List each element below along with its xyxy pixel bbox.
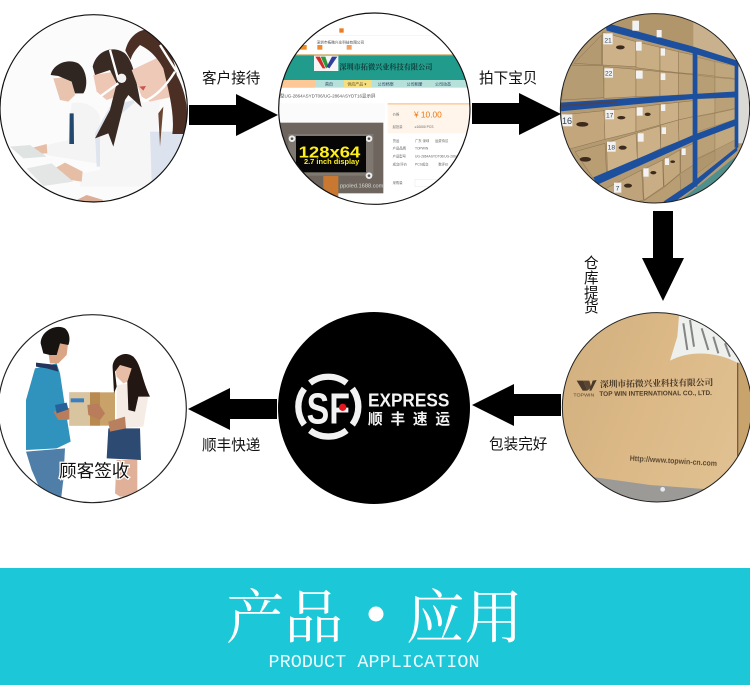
product specs xyxy=(393,138,458,187)
shipping label xyxy=(670,316,740,363)
navigation bar: 供应产品 ▾ xyxy=(347,81,366,87)
storage boxes: right bay xyxy=(697,57,735,173)
blue shelf beams xyxy=(560,24,738,205)
label: packed: 包装完好 xyxy=(489,436,547,453)
photo circle: customer signs for parcel xyxy=(0,314,187,504)
product specs: 运费待议 xyxy=(435,138,449,143)
product specs: 产品型号 xyxy=(393,154,407,159)
price panel: 起批量 xyxy=(393,124,403,129)
navigation bar xyxy=(270,80,477,88)
brand name: EXPRESS xyxy=(368,390,449,411)
label: warehouse pickup: 仓 xyxy=(584,255,599,272)
banner subtitle: PRODUCT APPLICATION xyxy=(268,652,480,673)
box labels and handles: 22 xyxy=(605,71,613,78)
agent: woman in the middle xyxy=(27,49,142,186)
brand name Chinese: 顺丰速运 xyxy=(368,410,450,428)
product specs: 采购量 xyxy=(393,180,403,185)
label: warehouse pickup: 库 xyxy=(584,270,599,287)
banner heading left: 产品 xyxy=(226,571,343,655)
arrow: shop page to warehouse xyxy=(472,93,561,135)
website address: Http://www.topwin-cn.com xyxy=(630,454,717,468)
storage boxes: left bay xyxy=(562,32,693,207)
shop header band: 深圳市拓微兴业科技有限公司 xyxy=(339,62,432,71)
caption: customer signature: 顾客签收 xyxy=(59,461,129,481)
product specs: 产品品牌 xyxy=(393,146,407,151)
agent: woman in the front xyxy=(125,30,187,183)
navigation bar: 公司档案 xyxy=(378,81,394,87)
agent: man at back xyxy=(10,61,86,158)
product photo: OLED display: 128x64 xyxy=(299,144,361,161)
photo circle: warehouse shelves xyxy=(560,13,750,204)
product specs: 广东 深圳 xyxy=(415,138,430,143)
banner heading right: 应用 xyxy=(406,571,523,655)
product specs: 成交/评价 xyxy=(393,162,408,167)
company logo mark xyxy=(573,380,597,398)
arrow: packaging to courier xyxy=(472,384,561,426)
logo ring xyxy=(298,377,358,437)
product photo: OLED display xyxy=(278,123,384,197)
navigation bar: 首页 xyxy=(325,81,333,87)
arrow: warehouse down to packaging xyxy=(642,211,684,301)
price panel: ≥10000 PCS xyxy=(415,125,434,129)
company name text: 深圳市拓微兴业科技有限公司 xyxy=(600,376,714,389)
circle: SF Express logo xyxy=(278,312,470,504)
arrow: courier to customer xyxy=(188,388,277,430)
banner dot xyxy=(368,606,384,622)
shop header band xyxy=(284,54,465,80)
product specs: 货运 xyxy=(393,138,400,143)
box labels and handles: 7 xyxy=(616,186,620,193)
label: warehouse pickup xyxy=(584,255,599,316)
photo circle: online shop page xyxy=(278,12,471,205)
navigation bar: 公司相册 xyxy=(407,81,423,87)
company English name: TOP WIN INTERNATIONAL CO., LTD. xyxy=(599,390,712,398)
label: SF courier: 顺丰快递 xyxy=(202,437,261,454)
label: warehouse pickup: 提 xyxy=(584,285,599,302)
box labels and handles: 21 xyxy=(604,37,612,44)
box labels and handles: 17 xyxy=(606,112,614,119)
woman receiving parcel xyxy=(107,354,150,497)
photo circle: online shop page: 深圳市拓微兴业科技有限公司 xyxy=(317,39,365,44)
photo circle: branded carton xyxy=(562,312,750,502)
company logo mark: TOPWIN xyxy=(573,392,595,398)
box labels and handles: 16 xyxy=(562,116,572,126)
navigation bar: 公司动态 xyxy=(435,81,451,87)
product specs: UG-2864ASYDT06/UG-2864 xyxy=(415,155,458,159)
box labels and handles xyxy=(562,21,686,193)
parcel xyxy=(69,392,115,426)
product specs: TOPWIN xyxy=(415,147,429,151)
box labels and handles: 18 xyxy=(608,144,615,151)
product specs: 数评价 xyxy=(438,162,449,167)
photo circle: online shop page: 型UG-2864ASYDT06/UG-2864ASYDT16显示屏 xyxy=(280,92,376,99)
price panel xyxy=(388,103,474,133)
arrow: customer service to shop page xyxy=(189,94,278,136)
label: place order: 拍下宝贝 xyxy=(479,70,537,87)
product photo: OLED display: 2.7 inch display xyxy=(304,157,360,166)
price panel: 价格 xyxy=(393,111,400,116)
logo letters: SF xyxy=(307,384,350,433)
label: customer reception: 客户接待 xyxy=(202,70,261,87)
product photo: OLED display: ppoled.1688.com xyxy=(340,184,384,190)
banner: product application xyxy=(0,568,750,685)
photo circle: customer service agents xyxy=(0,14,188,203)
product specs: PCS成交 xyxy=(415,162,429,167)
price panel: ¥ 10.00 xyxy=(413,109,442,119)
label: warehouse pickup: 货 xyxy=(584,299,599,316)
courier man xyxy=(26,326,71,496)
